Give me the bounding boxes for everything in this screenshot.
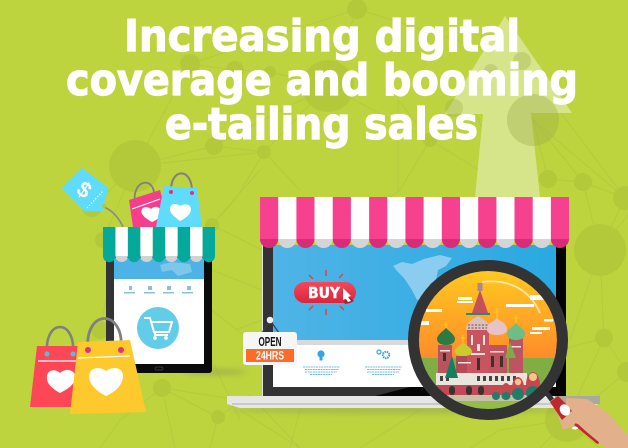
lens rim (414, 266, 562, 414)
title: coverage and booming (66, 55, 578, 106)
open 24hrs sign: OPEN (258, 335, 282, 349)
gears icon and caption (365, 350, 402, 374)
cart button (137, 307, 179, 349)
laptop (262, 245, 566, 396)
tablet (106, 255, 212, 373)
crosses (444, 308, 518, 342)
store awning (260, 197, 569, 248)
yellow shopping bag (70, 318, 146, 414)
price tag: $ (72, 176, 96, 203)
open 24hrs sign: 24HRS (256, 348, 284, 362)
lens scene: cathedral (415, 270, 561, 413)
glass highlight (482, 281, 540, 313)
towers (438, 345, 452, 373)
title: e-tailing sales (165, 99, 478, 150)
title (66, 11, 578, 150)
ground terrace (446, 395, 528, 401)
tablet nav icons (124, 286, 193, 294)
laptop base (227, 396, 600, 408)
hand (550, 396, 628, 448)
tablet awning (103, 227, 215, 262)
magnifying glass (414, 266, 602, 444)
open 24hrs sign (243, 317, 297, 365)
tablet header banner (114, 258, 204, 279)
pink shopping bag (129, 183, 170, 227)
buy button (294, 270, 356, 315)
clouds (421, 295, 553, 334)
bulb icon and caption (303, 350, 340, 374)
red shopping bag (30, 327, 88, 407)
green spire (445, 356, 458, 378)
buy button: BUY (308, 284, 341, 302)
price tag (63, 169, 123, 227)
lower building (436, 373, 527, 395)
device shadows (183, 369, 570, 413)
tablet map (160, 262, 192, 276)
laptop screen banner (273, 245, 556, 340)
handle (546, 392, 602, 444)
blue shopping bag (156, 173, 202, 227)
world map (393, 255, 452, 300)
title: Increasing digital (124, 11, 520, 62)
onion domes (437, 328, 455, 345)
up arrow (445, 16, 572, 197)
matryoshka dolls (492, 372, 540, 400)
